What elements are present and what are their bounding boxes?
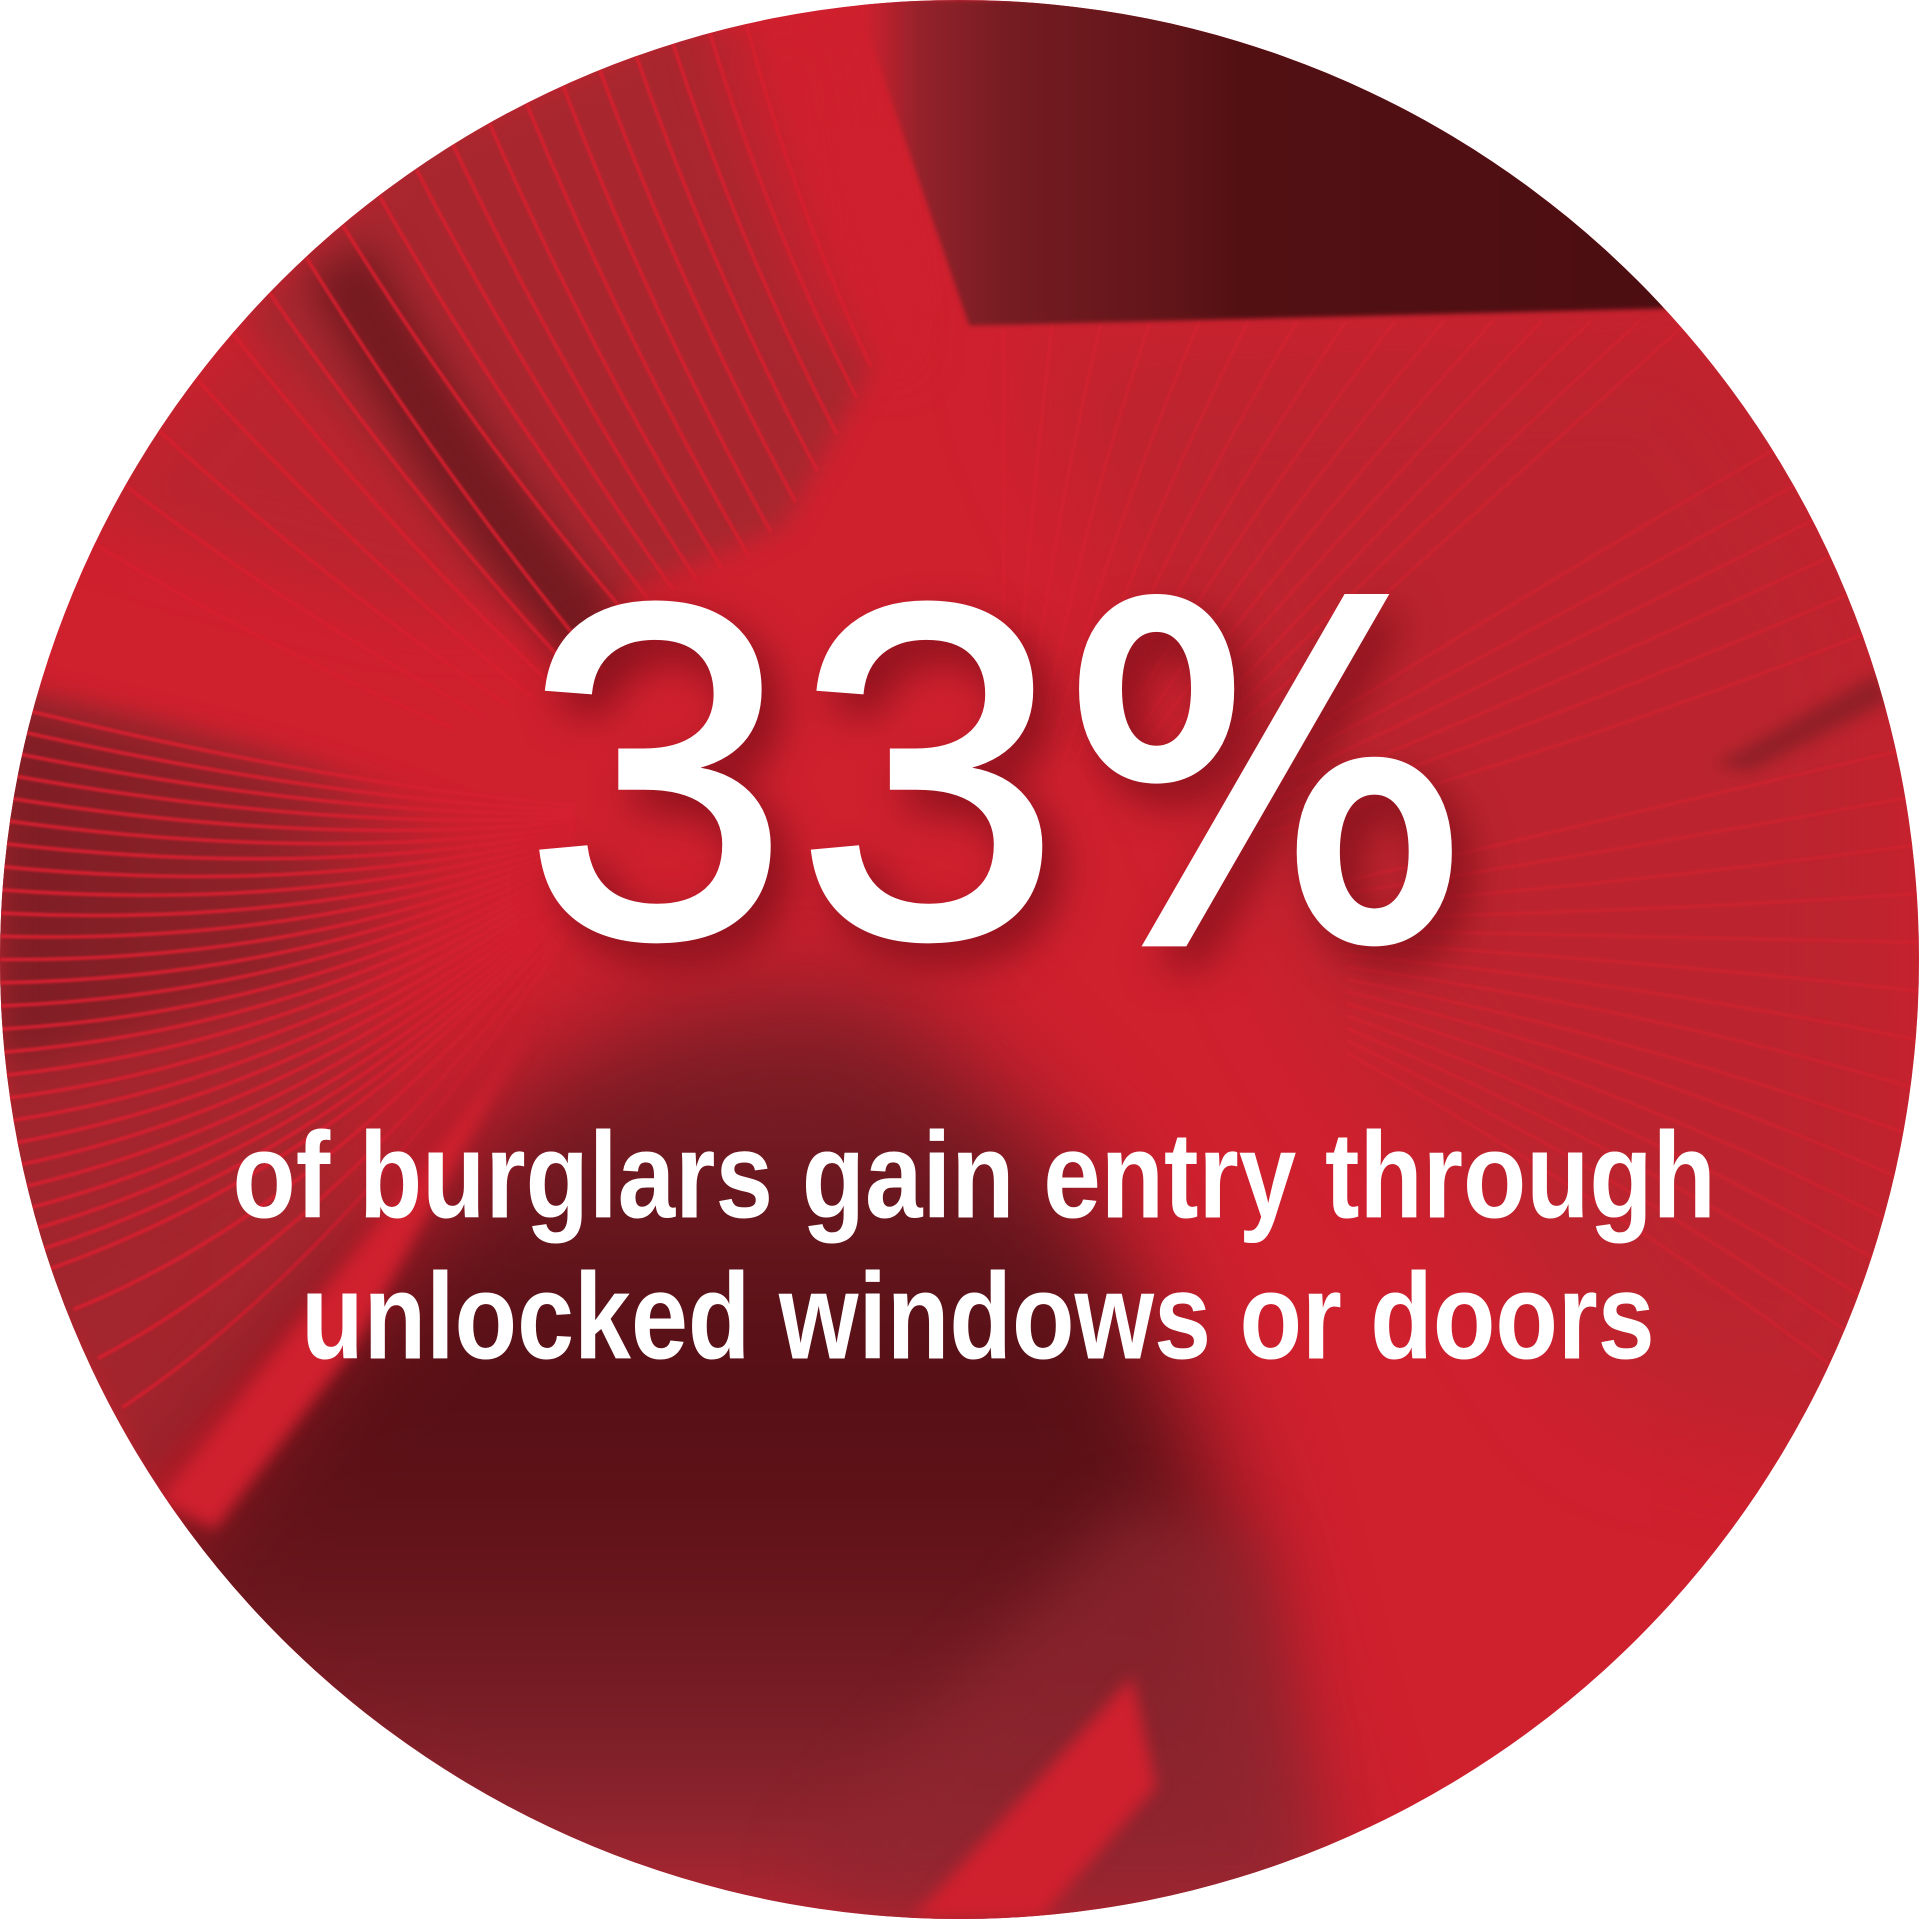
upper left streak panel (93, 6, 877, 676)
dark top block (857, 0, 1667, 326)
dark lower blob (73, 979, 1334, 1919)
big statistic: 33% (524, 505, 1471, 1042)
edge streak on right (1713, 673, 1891, 771)
right side shading (1028, 306, 1919, 1469)
caption line two: unlocked windows or doors (301, 1247, 1655, 1384)
percent sign: % (1060, 515, 1471, 1042)
left streak panel (0, 680, 466, 1482)
bright streak at bottom (912, 1677, 1157, 1919)
right streak lines (1004, 321, 1919, 1432)
digits: 33 (524, 505, 1067, 1038)
